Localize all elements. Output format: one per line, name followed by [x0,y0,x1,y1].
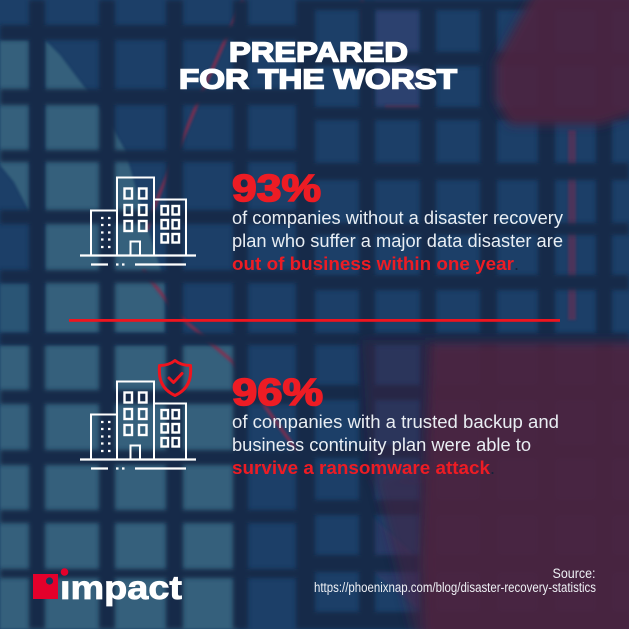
big number 93%: 93% [232,168,321,210]
maroon overlays [362,0,629,629]
stat: 96% [232,372,559,478]
red streaks [143,0,572,455]
stat: 93% [232,168,563,274]
description text: of companies without a disaster recovery [232,208,563,228]
logo: impact [33,568,182,606]
title [179,36,457,94]
logo mark [33,574,58,599]
description text: out of business within one year [232,254,514,274]
description text: plan who suffer a major data disaster are [232,231,563,251]
divider [69,319,560,322]
description text: survive a ransomware attack [232,458,491,478]
source note [314,566,596,595]
description text: of companies with a trusted backup and [232,412,559,432]
description text: business continuity plan were able to [232,435,531,455]
source note: Source: [552,566,596,581]
big number 96%: 96% [232,372,323,414]
description text [232,208,563,274]
title: PREPARED [229,36,408,68]
title: FOR THE WORST [179,64,457,94]
logo wordmark: impact [60,569,182,606]
description text: . [514,254,519,274]
description text: . [490,458,495,478]
icon: office buildings [80,178,196,264]
description text [232,412,559,478]
icon: red shield with check [159,360,191,396]
icon: office buildings with shield [80,360,196,468]
